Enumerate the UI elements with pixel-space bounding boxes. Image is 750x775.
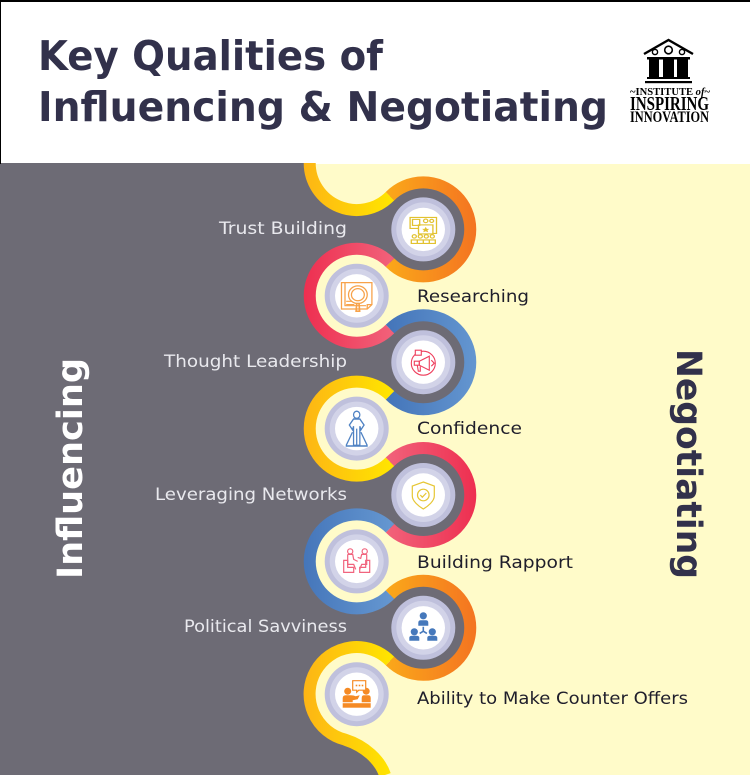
title: Influencing & Negotiating: [38, 83, 608, 131]
panel: negotiating background: [0, 164, 750, 775]
icon: thought leadership: [391, 330, 455, 394]
labels: influencing qualities: Thought Leadership: [163, 352, 347, 372]
labels: influencing qualities: [155, 219, 347, 637]
icon: trust building: [391, 197, 455, 261]
logo: Institute of Inspiring Innovation: INNOVATION: [630, 109, 709, 126]
labels: negotiating qualities: Ability to Make Counter Offers: [417, 689, 688, 709]
icon: researching: [325, 264, 389, 328]
labels: influencing qualities: Leveraging Networks: [155, 485, 347, 505]
icon: confidence: [325, 397, 389, 461]
icon: political savviness: [391, 596, 455, 660]
labels: negotiating qualities: Researching: [417, 287, 529, 307]
icon: leveraging networks: [391, 463, 455, 527]
logo: Institute of Inspiring Innovation: [630, 40, 711, 126]
labels: influencing qualities: Trust Building: [218, 219, 347, 239]
logo: Institute of Inspiring Innovation: ~INSTITUTE of~: [630, 87, 711, 98]
icon: ability to make counter offers: [325, 662, 389, 726]
labels: negotiating qualities: [417, 287, 688, 709]
side label: Influencing: Influencing: [51, 358, 91, 579]
title: Key Qualities of: [38, 32, 384, 80]
title: [38, 32, 608, 131]
ribbon connecting the circles: [310, 163, 470, 775]
icon: building rapport: [325, 529, 389, 593]
labels: negotiating qualities: Building Rapport: [417, 553, 573, 573]
header band: [0, 0, 750, 164]
labels: negotiating qualities: Confidence: [417, 419, 522, 439]
logo: Institute of Inspiring Innovation: INSPIRING: [630, 93, 709, 115]
labels: influencing qualities: Political Savviness: [184, 617, 347, 637]
panel: influencing background: [0, 163, 470, 775]
side label: Negotiating: Negotiating: [668, 349, 708, 579]
